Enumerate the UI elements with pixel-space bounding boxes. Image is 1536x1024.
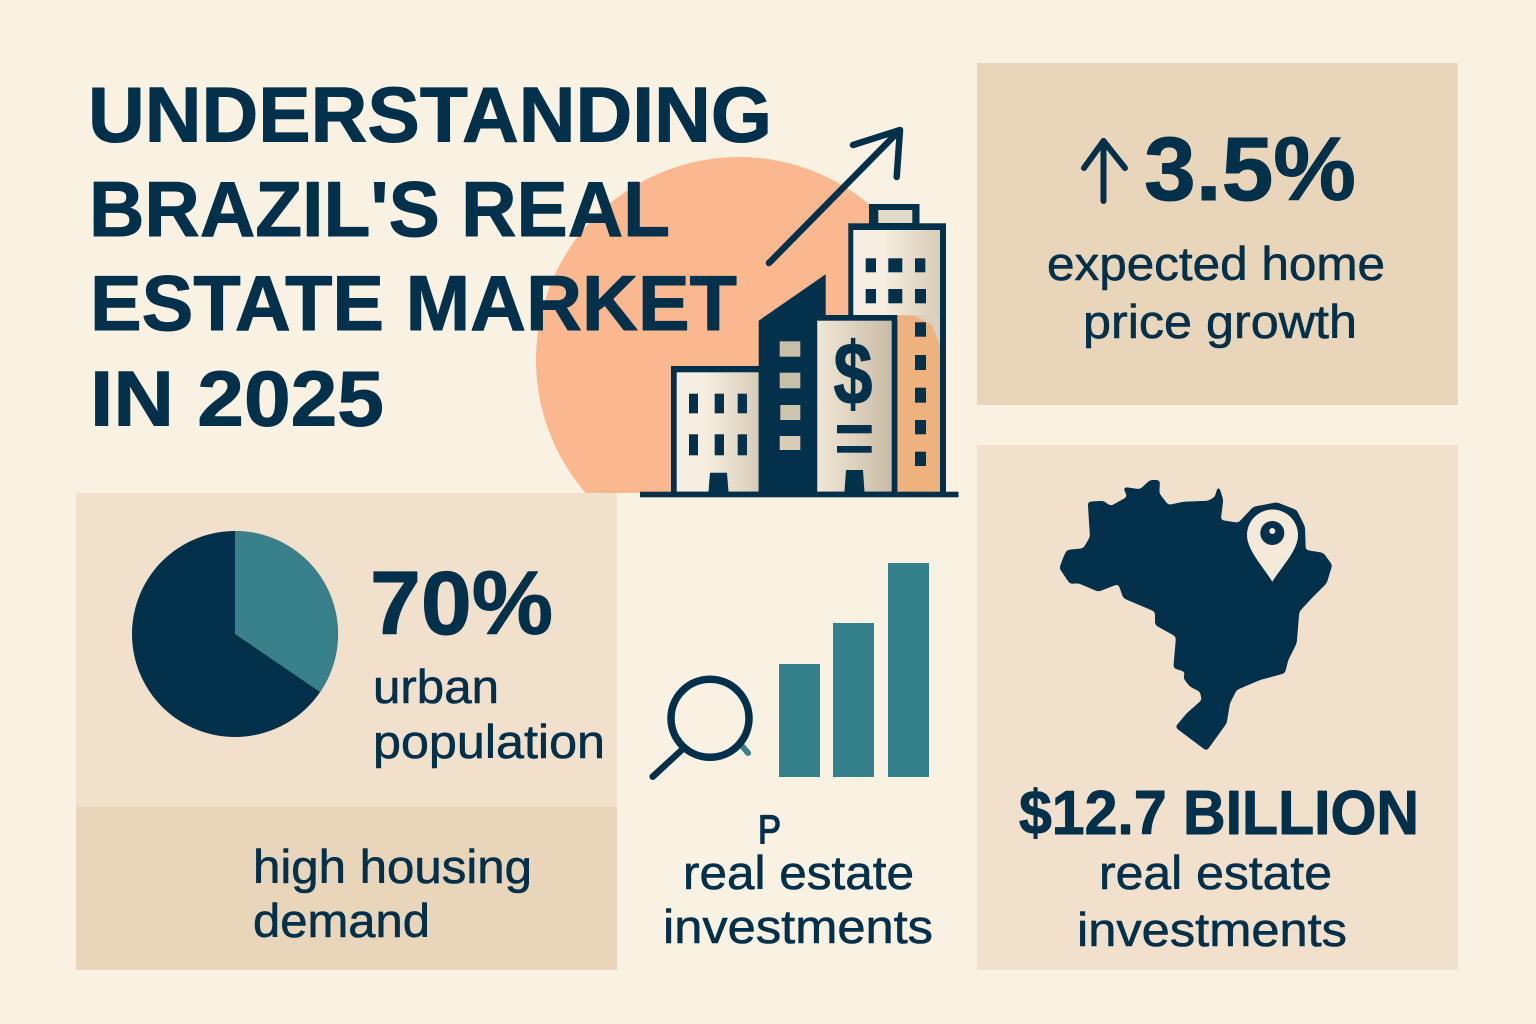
bar chart — [779, 563, 929, 777]
text: real estate investments: real estate — [1099, 846, 1332, 899]
centre dollar building — [817, 315, 897, 493]
text: high housing demand: high housing — [253, 840, 532, 893]
panel: home price growth — [977, 63, 1458, 405]
text: centre caption: P — [758, 808, 781, 852]
text: centre caption: real estate — [683, 846, 914, 899]
icon: location pin — [1247, 510, 1298, 582]
text: urban population: population — [373, 715, 605, 768]
text: real estate investments — [1077, 846, 1347, 956]
panel: urban population — [76, 493, 617, 807]
text: high housing demand: demand — [253, 894, 430, 947]
panel: high housing demand — [76, 807, 617, 970]
ground line — [640, 492, 958, 497]
title: UNDERSTANDING — [88, 70, 772, 158]
stat: 3.5%: 3.5% — [1144, 120, 1356, 220]
icon: city buildings — [640, 204, 958, 497]
icon: magnifying glass — [653, 679, 749, 777]
icon: Brazil map with pin — [1059, 480, 1332, 751]
title: BRAZIL'S REAL — [89, 165, 670, 253]
text: centre caption — [663, 808, 933, 953]
centre dollar building: $ — [833, 324, 873, 423]
left building — [671, 366, 761, 494]
icon: growth arrow — [769, 130, 900, 263]
panel: Brazil investments — [977, 445, 1458, 970]
dark building — [759, 274, 826, 493]
text: expected home price growth: expected home — [1047, 237, 1385, 290]
tall building — [848, 204, 946, 493]
text: centre caption: investments — [663, 900, 933, 953]
text: urban population: urban — [373, 660, 499, 713]
decorative sun circle — [536, 157, 869, 493]
stat: $12.7 billion: $12.7 BILLION — [1019, 779, 1419, 848]
text: real estate investments: investments — [1077, 903, 1347, 956]
text: expected home price growth — [1047, 237, 1385, 348]
pie chart — [132, 531, 338, 737]
title: IN 2025 — [90, 354, 384, 442]
icon: up arrow — [1084, 141, 1125, 201]
text: high housing demand — [253, 840, 532, 947]
text: expected home price growth: price growth — [1083, 295, 1357, 348]
title: ESTATE MARKET — [90, 259, 737, 347]
title — [88, 70, 772, 442]
text: urban population — [373, 660, 605, 768]
stat: 70%: 70% — [370, 554, 553, 654]
